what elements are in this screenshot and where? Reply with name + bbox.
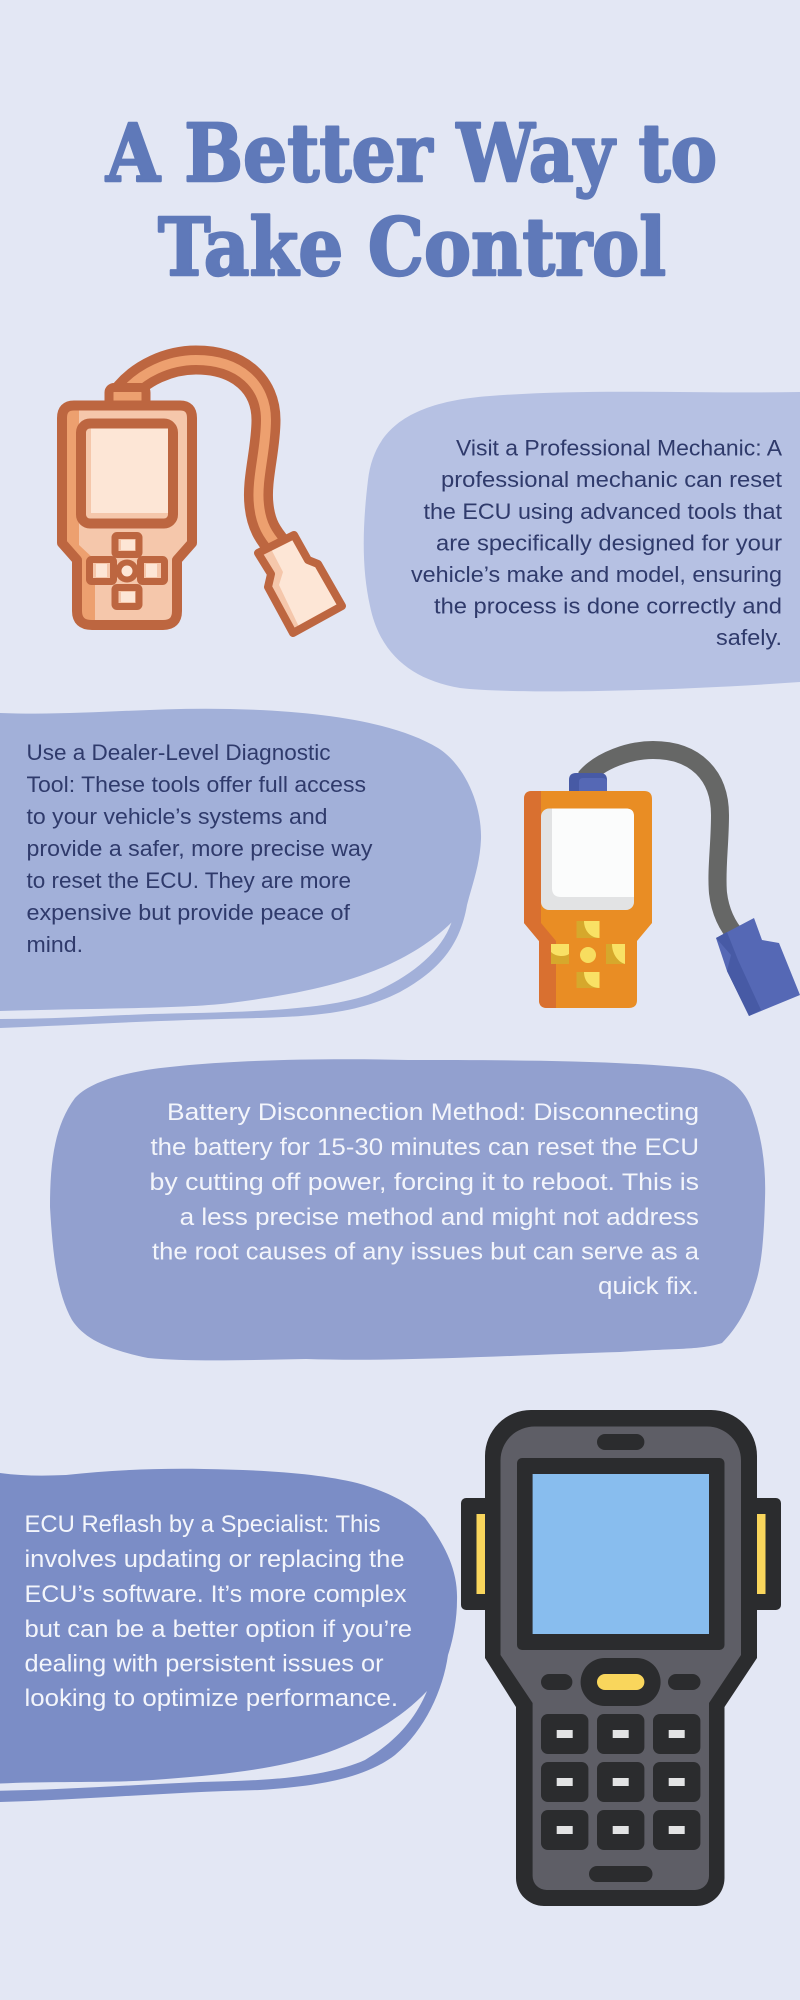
text: dealer-level tool: Tool: These tools offer full access xyxy=(26,772,366,797)
panel: ECU reflash xyxy=(0,1469,457,1802)
text: ECU reflash: looking to optimize performance. xyxy=(24,1685,398,1712)
text: ECU reflash xyxy=(24,1511,412,1712)
text: dealer-level tool: Use a Dealer-Level Diagnostic xyxy=(26,740,330,765)
text: professional mechanic: vehicle’s make and model, ensuring xyxy=(411,562,782,587)
text: dealer-level tool: to reset the ECU. They are more xyxy=(26,868,351,893)
side grips xyxy=(461,1498,781,1610)
screen xyxy=(541,808,634,910)
icon: orange outlined scan tool xyxy=(62,360,342,633)
bottom pill xyxy=(589,1866,652,1882)
text: battery disconnection: the root causes of any issues but can serve as a xyxy=(152,1238,700,1266)
text: dealer-level tool: expensive but provide peace of xyxy=(26,900,351,925)
text: battery disconnection: a less precise method and might not address xyxy=(180,1204,699,1231)
text: dealer-level tool: mind. xyxy=(26,932,83,957)
text: ECU reflash: but can be a better option if you’re xyxy=(24,1616,412,1643)
d-pad buttons xyxy=(90,536,164,606)
connector xyxy=(569,773,607,791)
text: battery disconnection: by cutting off power, forcing it to reboot. This is xyxy=(150,1169,699,1196)
title: A Better Way to xyxy=(105,106,717,200)
keypad xyxy=(541,1714,700,1850)
d-pad buttons xyxy=(551,921,625,988)
screen xyxy=(81,424,173,524)
text: professional mechanic: Visit a Professional Mechanic: A xyxy=(456,436,782,461)
panel: professional mechanic xyxy=(364,392,800,691)
text: professional mechanic: safely. xyxy=(716,625,782,650)
text: professional mechanic: professional mechanic can reset xyxy=(441,467,782,492)
device body xyxy=(524,791,652,1008)
control buttons xyxy=(541,1658,700,1706)
icon: orange diagnostic tool xyxy=(524,750,800,1016)
text: ECU reflash: ECU’s software. It’s more complex xyxy=(24,1581,406,1608)
text: battery disconnection: the battery for 15-30 minutes can reset the ECU xyxy=(150,1134,699,1161)
plug xyxy=(716,918,800,1016)
speaker xyxy=(597,1434,644,1450)
connector xyxy=(109,388,146,406)
text: ECU reflash: involves updating or replacing the xyxy=(24,1546,404,1573)
icon: black handheld scanner xyxy=(461,1410,781,1906)
text: dealer-level tool: to your vehicle’s systems and xyxy=(26,804,328,829)
text: ECU reflash: ECU Reflash by a Specialist: This xyxy=(24,1511,380,1538)
text: professional mechanic: the process is done correctly and xyxy=(434,594,782,619)
text: professional mechanic: are specifically designed for your xyxy=(436,530,782,555)
text: battery disconnection xyxy=(150,1099,700,1300)
text: professional mechanic: the ECU using advanced tools that xyxy=(424,499,782,524)
plug xyxy=(258,535,342,633)
cable xyxy=(122,360,278,547)
title: Take Control xyxy=(158,200,666,294)
cable xyxy=(585,750,738,938)
text: dealer-level tool: provide a safer, more precise way xyxy=(26,836,372,861)
panel: battery disconnection xyxy=(50,1059,765,1360)
text: ECU reflash: dealing with persistent issues or xyxy=(24,1650,384,1678)
text: dealer-level tool xyxy=(26,740,372,957)
device body xyxy=(62,406,192,625)
text: battery disconnection: Battery Disconnection Method: Disconnecting xyxy=(167,1099,699,1126)
title xyxy=(105,106,717,294)
panel: dealer-level tool xyxy=(0,709,481,1028)
text: professional mechanic xyxy=(411,436,782,650)
device body xyxy=(485,1410,757,1906)
text: battery disconnection: quick fix. xyxy=(598,1273,699,1300)
screen xyxy=(517,1458,724,1650)
